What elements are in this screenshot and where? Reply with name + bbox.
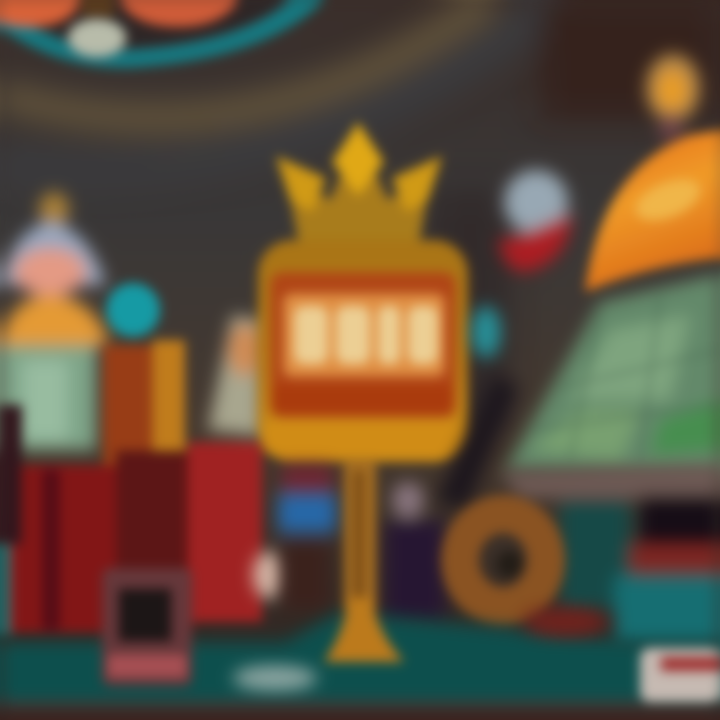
dark slot box bbox=[102, 568, 192, 686]
teal orb bbox=[106, 283, 160, 337]
green betting grid panel bbox=[505, 274, 720, 472]
sign: gold frame bbox=[258, 240, 468, 462]
orange and red columns bbox=[0, 340, 262, 635]
sign: bright lettering glow bbox=[294, 306, 438, 364]
orange dome bbox=[585, 130, 720, 292]
ceiling dome: teal ring with orange centre bbox=[0, 0, 325, 68]
red chip near ring bbox=[523, 607, 607, 637]
background: ceiling arcs bbox=[0, 0, 720, 430]
teal floor bbox=[0, 612, 720, 720]
grid lines on panel bbox=[530, 295, 720, 460]
pale glove beside column bbox=[253, 551, 287, 599]
red and white chip bottom right bbox=[640, 648, 720, 702]
bronze ring bbox=[460, 514, 546, 606]
left lamp tower bbox=[0, 192, 110, 450]
lamp finial on dome bbox=[646, 54, 700, 140]
panel base and right lower area bbox=[500, 464, 720, 643]
right teal accent behind sign bbox=[471, 306, 501, 358]
white chip on floor bbox=[233, 665, 317, 691]
red and white ball bbox=[498, 170, 572, 272]
crown bbox=[276, 122, 442, 250]
pale figure behind sign bbox=[208, 315, 262, 436]
centre debris: blue chip and figures bbox=[278, 465, 445, 620]
dark diagonal post bbox=[436, 375, 518, 510]
sign post bbox=[324, 460, 404, 662]
